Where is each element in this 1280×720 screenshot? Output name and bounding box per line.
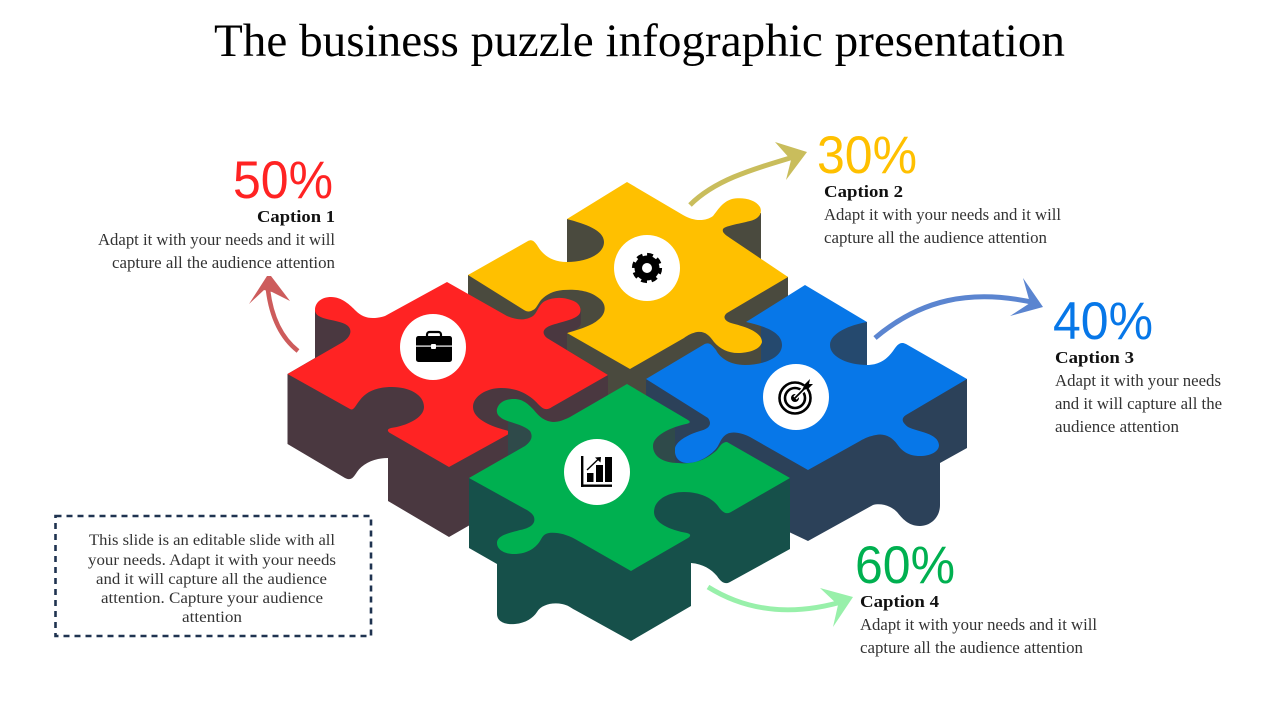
callout: caption 3: Caption 3: [1055, 348, 1134, 367]
puzzle wall: red piece: [288, 310, 608, 537]
callout: caption 1: capture all the audience attention: [112, 253, 335, 272]
puzzle wall: blue piece: [646, 310, 967, 541]
callout: caption 2: Adapt it with your needs and it will: [824, 205, 1061, 224]
callout: caption 2: [817, 126, 1061, 247]
icon: bar chart: [564, 439, 630, 505]
callout: caption 3: and it will capture all the: [1055, 394, 1222, 413]
callout: caption 4: [855, 536, 1097, 657]
icon: briefcase: [400, 314, 466, 380]
callout: caption 1: Caption 1: [257, 207, 335, 226]
callout: caption 4: capture all the audience attention: [860, 638, 1083, 657]
puzzle top: yellow piece: [468, 182, 788, 369]
callout: caption 2: capture all the audience attention: [824, 228, 1047, 247]
icon: target: [763, 364, 829, 430]
puzzle top: green piece: [469, 384, 790, 571]
arrow: blue: [875, 278, 1043, 338]
callout: caption 3: [1053, 292, 1222, 436]
callout: caption 3: Adapt it with your needs: [1055, 371, 1221, 390]
callout: caption 3: 40%: [1053, 292, 1153, 351]
callout: caption 3: audience attention: [1055, 417, 1179, 436]
arrow: yellow: [690, 142, 807, 205]
callout: caption 1: 50%: [233, 151, 333, 210]
callout: caption 2: 30%: [817, 126, 917, 185]
text box: dashed note: This slide is an editable slide with all: [89, 532, 336, 549]
puzzle wall: yellow piece: [468, 210, 788, 410]
puzzle top: red piece: [288, 282, 608, 467]
puzzle wall: green piece: [469, 420, 790, 641]
puzzle top: blue piece: [646, 285, 967, 470]
callout: caption 4: Caption 4: [860, 592, 940, 611]
text box: dashed note: attention: [182, 609, 242, 626]
text box: dashed note: attention. Capture your audience: [101, 590, 323, 607]
icon: gear: [614, 235, 680, 301]
callout: caption 2: Caption 2: [824, 182, 903, 201]
arrow: red: [249, 276, 298, 351]
text box: dashed note: your needs. Adapt it with your needs: [88, 552, 336, 569]
arrow: green: [708, 587, 853, 627]
text box: dashed note: and it will capture all the audience: [96, 571, 327, 588]
callout: caption 1: Adapt it with your needs and it will: [98, 230, 335, 249]
callout: caption 1: [98, 151, 335, 272]
callout: caption 4: 60%: [855, 536, 955, 595]
callout: caption 4: Adapt it with your needs and it will: [860, 615, 1097, 634]
text box: dashed note: [56, 516, 371, 636]
title: The business puzzle infographic presentation: [214, 15, 1065, 67]
